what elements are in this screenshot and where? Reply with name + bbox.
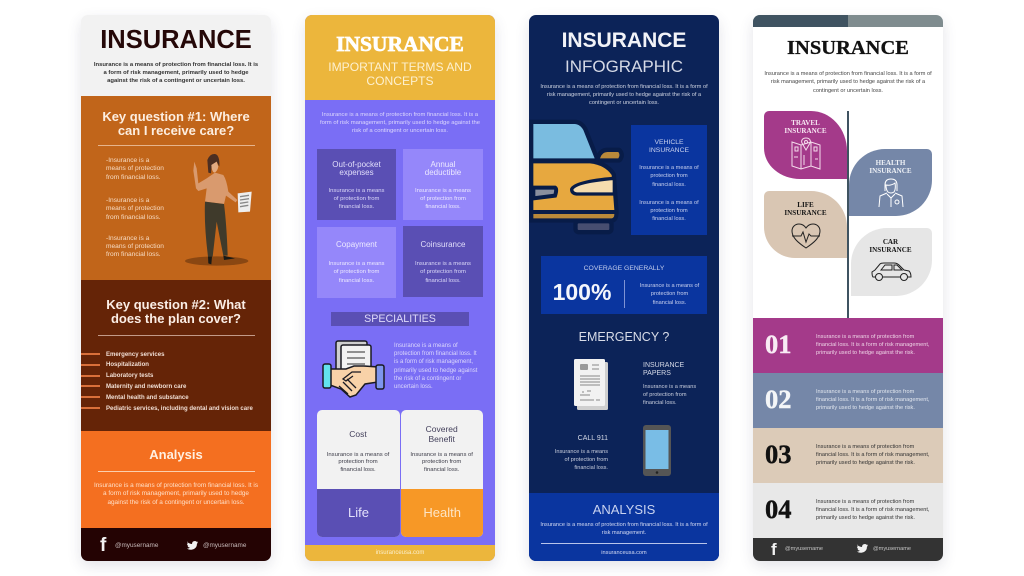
card: coverage generally: Insurance is a means of: [640, 283, 699, 289]
body text: [94, 482, 258, 506]
website: insuranceusa.com: [601, 550, 647, 556]
leaf: life insurance: [764, 191, 847, 258]
heading: does the plan cover?: [111, 311, 241, 326]
card: annual deductible: [403, 149, 483, 220]
coverage list: Laboratory tests: [106, 373, 153, 379]
intro text: [540, 84, 708, 106]
card: out-of-pocket expenses: financial loss.: [339, 204, 374, 210]
card: out-of-pocket expenses: [317, 149, 396, 220]
card: out-of-pocket expenses: Insurance is a means: [328, 188, 384, 194]
leaf: car insurance: [851, 228, 932, 296]
card: vehicle insurance: [631, 125, 707, 235]
card: cost / life: financial loss.: [340, 467, 376, 473]
panel: orange infographic: [81, 15, 271, 561]
twitter handle: @myusername: [203, 542, 246, 548]
icon: twitter: [857, 544, 868, 553]
specialities text: [394, 342, 478, 390]
band 03: [753, 428, 943, 483]
panel: leaf infographic: [753, 15, 943, 561]
intro text: Insurance is a means of protection from financial loss. It is: [94, 62, 258, 68]
coverage list: Pediatric services, including dental and vision care: [106, 406, 253, 412]
facebook handle: @myusername: [785, 546, 823, 552]
specialities text: primarily used to hedge against: [394, 368, 477, 374]
subtitle: IMPORTANT TERMS AND: [328, 60, 472, 74]
icon: insurance papers: [574, 359, 608, 410]
icon: car front: [529, 120, 624, 234]
heading: ANALYSIS: [593, 502, 655, 516]
card: copayment: [317, 227, 396, 298]
label: life: [317, 489, 400, 537]
bullet text 2: means of protection: [106, 205, 164, 212]
band 01: 01: [765, 329, 792, 359]
coverage list: [106, 352, 253, 412]
insurance papers body: of protection from: [643, 392, 687, 398]
card: cost / life: [317, 410, 400, 537]
card: annual deductible: deductible: [425, 168, 461, 177]
title: INSURANCE: [100, 26, 252, 54]
card: out-of-pocket expenses: expenses: [339, 168, 374, 177]
bullet text 1: means of protection: [106, 165, 164, 172]
icon: doctor: [878, 178, 904, 207]
leaf: life insurance: INSURANCE: [784, 209, 827, 217]
coverage list: Maternity and newborn care: [106, 384, 186, 390]
card: copayment: of protection from: [334, 269, 379, 275]
leaf: health insurance: HEALTH: [876, 159, 905, 167]
leaf: life insurance: LIFE: [797, 201, 814, 209]
footer: social handles: [81, 528, 271, 561]
stat: 100%: 100%: [553, 278, 611, 304]
dash markers: [81, 353, 100, 409]
icon: folded map: [792, 138, 820, 170]
heading: [106, 296, 246, 326]
leaf: health insurance: INSURANCE: [869, 167, 912, 175]
card: vehicle insurance: INSURANCE: [649, 147, 689, 154]
card: covered benefit / health: Insurance is a means of: [410, 452, 473, 458]
card: out-of-pocket expenses: of protection from: [334, 196, 379, 202]
bullet text 1: -Insurance is a: [106, 157, 149, 164]
card: covered benefit / health: protection from: [422, 459, 461, 465]
card: vehicle insurance: Insurance is a means of: [639, 165, 699, 171]
card: vehicle insurance: protection from: [650, 208, 688, 214]
leaf: car insurance: INSURANCE: [869, 246, 912, 254]
panel: navy infographic: [529, 15, 719, 561]
card: vehicle insurance: protection from: [650, 173, 688, 179]
insurance papers text: INSURANCE: [643, 362, 684, 369]
bullet text 2: from financial loss.: [106, 214, 161, 221]
intro text: Insurance is a means of protection from financial loss. It is a: [322, 112, 478, 118]
label: health: Health: [423, 505, 461, 520]
footer: social handles: [753, 538, 943, 561]
call 911 body: Insurance is a means: [555, 448, 608, 454]
heading: Key question #1: Where: [102, 108, 250, 124]
leaf: travel insurance: TRAVEL: [791, 119, 820, 127]
call 911 body: of protection from: [564, 457, 608, 463]
intro text: [764, 71, 932, 94]
band 04: 04: [765, 494, 792, 524]
intro text: Insurance is a means of protection from financial loss. It is a form of: [764, 71, 932, 77]
card: cost / life: Cost: [349, 429, 367, 439]
intro text: form of risk management, primarily used to hedge against the: [320, 120, 480, 126]
coverage list: Mental health and substance: [106, 395, 189, 401]
card: copayment: Insurance is a means: [328, 261, 384, 267]
card: vehicle insurance: VEHICLE: [654, 139, 684, 146]
section: header: [305, 15, 495, 100]
panel: purple infographic: [305, 15, 495, 561]
heading: [102, 108, 250, 138]
icon: car: [872, 262, 912, 281]
intro text: against the risk of a contingent or uncertain loss.: [107, 78, 245, 84]
specialities text: Insurance is a means of: [394, 342, 458, 348]
card: covered benefit / health: Covered: [426, 424, 458, 434]
specialities text: uncertain loss.: [394, 384, 433, 390]
card: copayment: financial loss.: [339, 278, 374, 284]
band 02: [753, 373, 943, 428]
title: INSURANCE: [562, 29, 686, 52]
icon: facebook: f: [100, 535, 106, 556]
card: coverage generally: protection from: [651, 291, 688, 297]
title: INSURANCE: [336, 32, 464, 56]
card: covered benefit / health: Benefit: [428, 434, 455, 444]
band 04: Insurance is a means of protection from: [816, 498, 914, 504]
card: coverage generally: COVERAGE GENERALLY: [584, 264, 664, 272]
insurance papers body: [643, 384, 696, 406]
call 911 heading: CALL 911: [578, 434, 608, 442]
label: life: Life: [348, 505, 369, 520]
heading: can I receive care?: [118, 123, 234, 138]
icon: facebook: f: [771, 540, 777, 559]
title: INSURANCE: [787, 37, 909, 59]
band 02: financial loss. It is a form of risk management,: [816, 397, 929, 403]
heading: Key question #2: What: [106, 296, 246, 312]
heading: specialities: [331, 312, 469, 326]
insurance papers text: PAPERS: [643, 370, 671, 377]
section: analysis: [81, 431, 271, 528]
intro text: Insurance is a means of protection from financial loss. It is a form of: [540, 84, 708, 90]
footer: website: insuranceusa.com: [376, 550, 424, 556]
insurance papers text: [643, 362, 684, 377]
footer: website: [305, 545, 495, 561]
intro text: risk management, primarily used to hedge against the risk of a: [547, 92, 701, 98]
heading: emergency: EMERGENCY ?: [579, 330, 669, 344]
card: coinsurance: financial loss.: [425, 278, 461, 284]
body text: risk management.: [602, 530, 646, 536]
bullet text 3: means of protection: [106, 243, 164, 250]
card: coinsurance: [403, 226, 483, 297]
body text: a form of risk management, primarily used to hedge: [103, 490, 249, 497]
card: annual deductible: financial loss.: [425, 204, 461, 210]
icon: woman holding document: [185, 154, 252, 266]
bullet text 3: [106, 234, 164, 258]
heading: Analysis: [149, 447, 203, 462]
card: cost / life: Insurance is a means of: [327, 452, 389, 458]
specialities text: protection from financial loss. It: [394, 351, 477, 357]
subtitle: [328, 60, 472, 88]
card: coverage generally: financial loss.: [653, 300, 686, 306]
leaf: car insurance: CAR: [883, 238, 898, 246]
intro text: a form of risk management, primarily used to hedge: [103, 70, 248, 76]
intro text: risk of a contingent or uncertain loss.: [352, 128, 448, 134]
bullet text 2: -Insurance is a: [106, 197, 149, 204]
intro text: [320, 112, 480, 134]
band 01: [753, 318, 943, 373]
band 03: primarily used to hedge against the risk.: [816, 460, 915, 466]
section: analysis: [529, 493, 719, 561]
icon: twitter: [187, 541, 198, 550]
band 04: primarily used to hedge against the risk.: [816, 515, 915, 521]
card: annual deductible: Insurance is a means: [415, 188, 471, 194]
leaf: travel insurance: INSURANCE: [784, 127, 827, 135]
body text: [540, 522, 708, 536]
leaf: health insurance: [849, 149, 932, 216]
band 01: primarily used to hedge against the risk.: [816, 350, 915, 356]
band 02: Insurance is a means of protection from: [816, 388, 914, 394]
leaf: travel insurance: [764, 111, 847, 179]
band 01: financial loss. It is a form of risk management,: [816, 342, 929, 348]
band 03: 03: [765, 439, 792, 469]
card: cost / life: protection from: [338, 459, 378, 465]
twitter handle: @myusername: [873, 546, 911, 552]
insurance papers body: Insurance is a means: [643, 384, 696, 390]
card: covered benefit / health: financial loss.: [424, 467, 459, 473]
band 03: financial loss. It is a form of risk management,: [816, 452, 929, 458]
specialities text: the risk of a contingent or: [394, 376, 461, 382]
band 04: [753, 483, 943, 538]
insurance papers body: financial loss.: [643, 400, 677, 406]
intro text: contingent or uncertain loss.: [589, 100, 659, 106]
bullet text 3: from financial loss.: [106, 251, 161, 258]
band 03: Insurance is a means of protection from: [816, 444, 914, 450]
icon: handshake over documents: [322, 340, 385, 398]
icon: heart pulse: [792, 224, 820, 248]
body text: Insurance is a means of protection from financial loss. It is: [94, 482, 258, 489]
coverage list: Emergency services: [106, 352, 164, 358]
card: vehicle insurance: financial loss.: [652, 182, 686, 188]
card: annual deductible: of protection from: [420, 196, 466, 202]
stem: [847, 111, 849, 318]
card: covered benefit / health: [401, 410, 483, 537]
facebook handle: @myusername: [115, 542, 158, 548]
icon: smartphone: [643, 425, 671, 476]
bullet text 1: [106, 157, 164, 181]
card: coinsurance: Coinsurance: [421, 240, 465, 248]
heading: specialities: SPECIALITIES: [364, 313, 436, 325]
card: coinsurance: of protection from: [420, 269, 466, 275]
specialities text: is a form of risk management,: [394, 359, 473, 365]
card: out-of-pocket expenses: Out-of-pocket: [332, 160, 381, 169]
card: vehicle insurance: financial loss.: [652, 216, 686, 222]
subtitle: INFOGRAPHIC: [565, 57, 683, 76]
section: key question 1: [81, 96, 271, 280]
body text: Insurance is a means of protection from financial loss. It is a form of: [540, 522, 708, 528]
intro text: [94, 62, 258, 84]
card: coinsurance: Insurance is a means: [415, 261, 471, 267]
intro text: risk management, primarily used to hedge against the risk of a: [771, 79, 925, 85]
band 02: 02: [765, 384, 792, 414]
body text: against the risk of a contingent or uncertain loss.: [107, 499, 245, 506]
section: key question 2: [81, 280, 271, 431]
bullet text 1: from financial loss.: [106, 174, 161, 181]
bullet text 2: [106, 197, 164, 221]
card: coverage generally: [541, 256, 707, 314]
bullet text 3: -Insurance is a: [106, 234, 149, 242]
band 02: primarily used to hedge against the risk.: [816, 405, 915, 411]
band 04: financial loss. It is a form of risk management,: [816, 507, 929, 513]
band 01: Insurance is a means of protection from: [816, 334, 914, 340]
top colour bar: [753, 15, 943, 27]
card: copayment: Copayment: [336, 240, 377, 248]
coverage list: Hospitalization: [106, 362, 149, 368]
subtitle: CONCEPTS: [366, 74, 434, 88]
call 911 body: [555, 448, 608, 471]
call 911 body: financial loss.: [574, 465, 608, 471]
card: annual deductible: Annual: [431, 160, 455, 169]
label: health: [401, 489, 484, 537]
intro text: contingent or uncertain loss.: [813, 88, 883, 94]
card: vehicle insurance: Insurance is a means of: [639, 200, 699, 206]
